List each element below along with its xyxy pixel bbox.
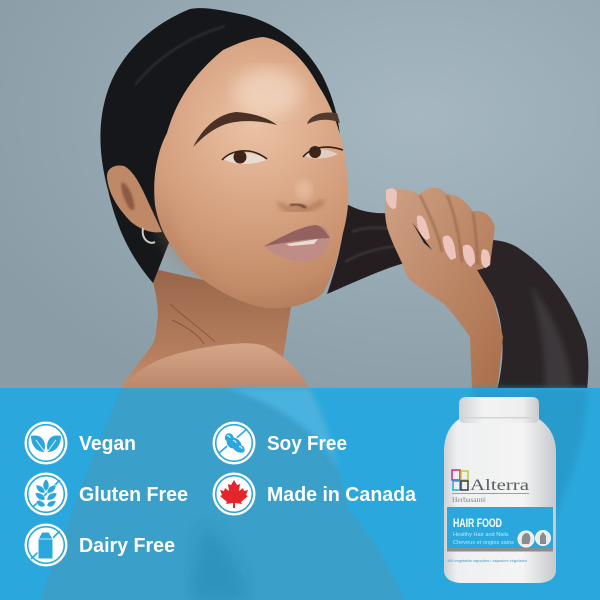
label: Vegan: Vegan (79, 432, 136, 455)
label icons (518, 531, 534, 547)
cheek shadow (158, 190, 225, 290)
photo: woman holding hair (100, 8, 588, 390)
logo mark (452, 470, 468, 490)
brand name: Alterra (470, 477, 529, 494)
lips (264, 225, 330, 262)
photo background (0, 0, 600, 390)
hair cap (100, 8, 340, 283)
eye left (223, 153, 267, 164)
hand (385, 188, 503, 390)
icon: dairy free (26, 524, 66, 566)
product bottle (444, 397, 556, 583)
face (154, 37, 348, 308)
icon: gluten free (26, 474, 66, 514)
blue panel (0, 388, 600, 600)
neck (120, 268, 312, 390)
icon: vegan (26, 422, 66, 464)
hair between thumb and fingers (412, 222, 432, 250)
eye right (304, 149, 338, 158)
label: Dairy Free: Dairy Free (79, 534, 175, 557)
label: Gluten Free: Gluten Free (79, 483, 188, 506)
finger shadows (420, 195, 478, 265)
hair held by the hand (327, 203, 420, 294)
bottle body (444, 418, 556, 583)
fingernails (386, 188, 490, 268)
label: Soy Free: Soy Free (267, 432, 347, 455)
sub-brand: Herbasanté (452, 495, 486, 504)
product bottle: Cheveux et ongles sains (453, 540, 514, 546)
icon: soy free (214, 422, 254, 464)
label band (447, 507, 553, 548)
shoulder (120, 343, 310, 390)
forehead highlight (234, 68, 302, 116)
eyebrows (193, 112, 277, 147)
earring (143, 228, 155, 243)
bottle cap (459, 397, 539, 423)
description: Healthy Hair and Nails (453, 532, 509, 538)
ear (107, 166, 162, 232)
product name: HAIR FOOD (453, 516, 502, 530)
capsule count: 360 vegetable capsules / capsules végétales (447, 559, 527, 563)
label: Made in Canada: Made in Canada (267, 483, 417, 506)
icon: made in canada (214, 474, 254, 514)
hair tail behind the hand (470, 240, 588, 390)
nose (279, 200, 323, 211)
ghost body (40, 388, 405, 600)
